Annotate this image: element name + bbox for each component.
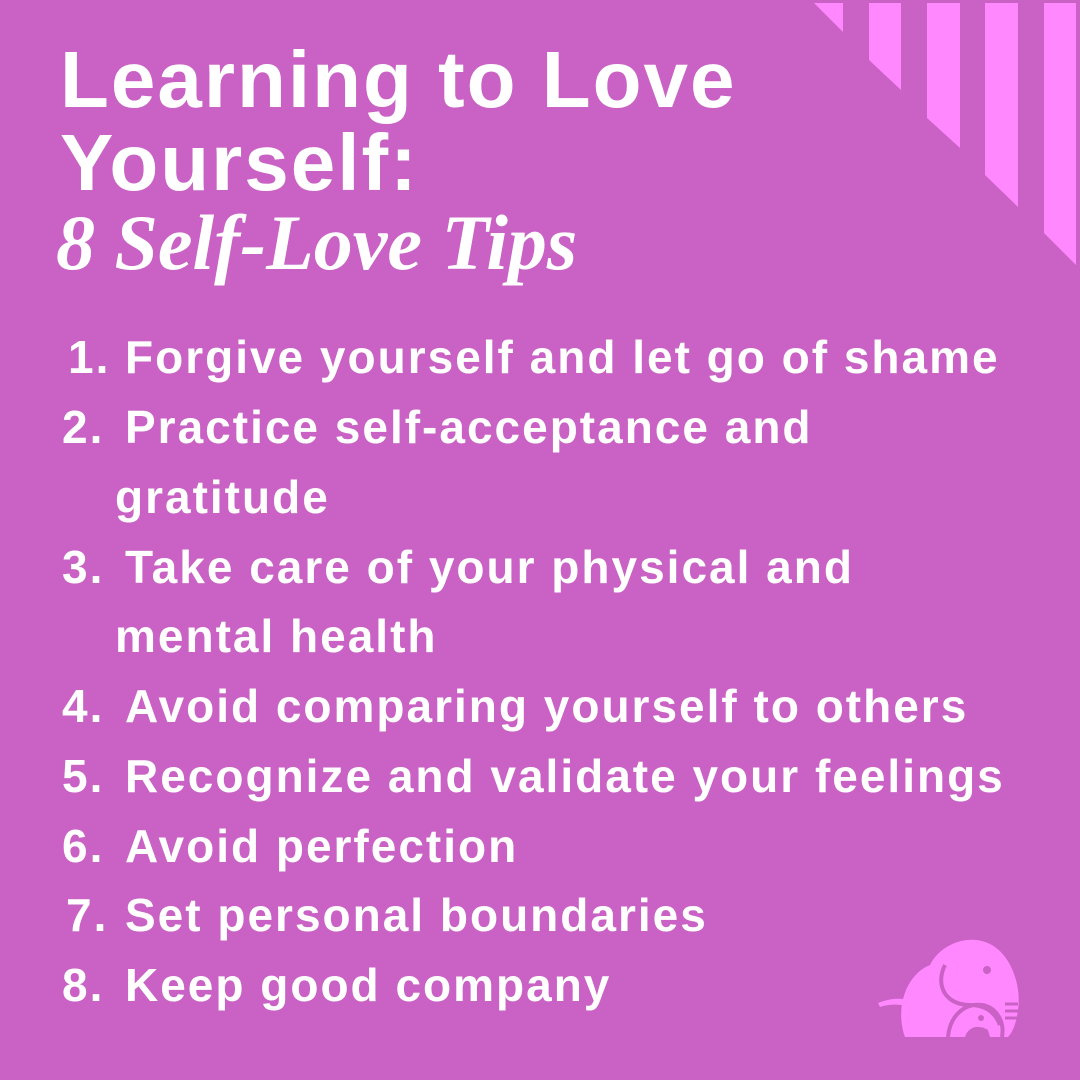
tips list: 4. [62, 680, 104, 732]
tips list: 5. [62, 750, 104, 802]
icon: elephant logo [878, 940, 1019, 1037]
tips list: 7. [66, 889, 108, 941]
tips list: Avoid perfection [125, 820, 518, 872]
tips list: gratitude [115, 471, 330, 523]
tips list: Set personal boundaries [125, 889, 708, 941]
tips list: Recognize and validate your feelings [125, 750, 1005, 802]
title [56, 35, 736, 286]
tips list: 3. [62, 541, 104, 593]
tips list: Forgive yourself and let go of shame [125, 331, 1000, 383]
tips list: Keep good company [125, 959, 611, 1011]
title: Learning to Love [60, 35, 736, 124]
decorative stripes top-right [814, 3, 1076, 265]
tips list: Take care of your physical and [125, 541, 854, 593]
tips list: mental health [115, 610, 438, 662]
tips list: Practice self-acceptance and [125, 401, 813, 453]
title: Yourself: [60, 118, 419, 207]
tips list [62, 331, 1005, 1011]
tips list: 6. [62, 820, 104, 872]
tips list: Avoid comparing yourself to others [125, 680, 968, 732]
tips list: 8. [62, 959, 104, 1011]
subtitle: 8 Self-Love Tips [56, 199, 577, 286]
tips list: 2. [62, 401, 104, 453]
tips list: 1. [68, 331, 110, 383]
